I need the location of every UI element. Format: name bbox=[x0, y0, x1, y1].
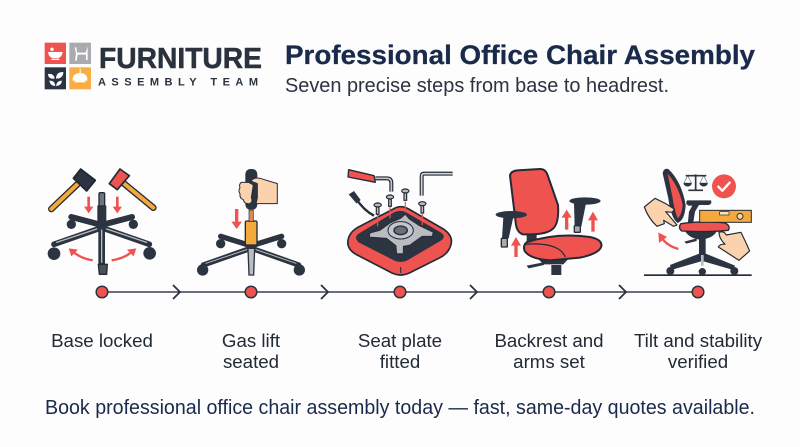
logo tile: red bowl bbox=[45, 43, 66, 64]
rotation arrows bbox=[69, 248, 136, 260]
five star base bbox=[48, 193, 156, 274]
right hand bbox=[718, 232, 750, 260]
dark mallet bbox=[51, 169, 95, 209]
spirit level bbox=[700, 210, 751, 222]
chair base bbox=[666, 229, 738, 275]
up arrows bbox=[511, 210, 598, 257]
step label 4: arms set bbox=[513, 351, 586, 372]
timeline arrows bbox=[173, 285, 626, 299]
timeline bbox=[96, 285, 704, 299]
icon: step 4 backrest and arms set bbox=[496, 169, 601, 275]
power tool cable bbox=[356, 198, 374, 216]
step label 5: verified bbox=[668, 351, 728, 372]
left arm bbox=[496, 211, 527, 247]
screwdriver bbox=[348, 170, 391, 192]
screws bbox=[374, 189, 426, 214]
icon: step 3 seat plate fitted bbox=[348, 170, 453, 275]
mounting plate bbox=[369, 214, 433, 254]
hex key bbox=[422, 174, 453, 196]
logo tile: dark leaves bbox=[45, 67, 66, 89]
icon: step 2 gas lift seated bbox=[197, 169, 305, 276]
right arm bbox=[569, 197, 601, 232]
tilt arrow bbox=[662, 238, 678, 249]
backrest bbox=[663, 169, 686, 223]
down arrow bbox=[231, 209, 242, 229]
subtitle: Seven precise steps from base to headrest. bbox=[285, 74, 669, 97]
seat crease bbox=[525, 244, 565, 257]
alignment ticks bbox=[378, 202, 422, 226]
seat cushion bbox=[524, 236, 601, 260]
seat bbox=[679, 222, 729, 232]
icon: step 1 base locked with mallets bbox=[48, 169, 156, 274]
step label 2: seated bbox=[223, 351, 279, 372]
handle bbox=[245, 169, 257, 210]
floor bbox=[644, 274, 752, 276]
logo tagline: ASSEMBLY TEAM bbox=[98, 76, 258, 88]
hand fingers bbox=[239, 182, 253, 204]
check badge bbox=[712, 174, 736, 198]
title: Professional Office Chair Assembly bbox=[285, 40, 755, 70]
timeline dots bbox=[96, 286, 704, 298]
step label 1: Base locked bbox=[51, 330, 153, 351]
seat underside bbox=[356, 211, 444, 262]
timeline line bbox=[102, 291, 698, 293]
balance scales bbox=[684, 174, 708, 190]
star base bbox=[197, 236, 305, 276]
logo bbox=[45, 43, 262, 89]
logo tile: grey chair bbox=[69, 43, 91, 64]
step label 2: Gas lift bbox=[222, 330, 280, 351]
backrest red panel bbox=[668, 174, 683, 218]
seat cushion bbox=[348, 207, 451, 275]
armrest bbox=[686, 200, 711, 232]
plate ring bbox=[388, 222, 413, 239]
step label 3: fitted bbox=[380, 351, 420, 372]
step label 5: Tilt and stability bbox=[634, 330, 762, 351]
call to action: Book professional office chair assembly today — fast, same-day quotes available. bbox=[45, 397, 755, 419]
gas lift cylinder bbox=[245, 210, 257, 245]
step label 3: Seat plate bbox=[358, 330, 442, 351]
hand palm bbox=[251, 178, 277, 204]
down arrows bbox=[84, 197, 122, 213]
seat front seam bbox=[399, 267, 402, 273]
step label 4: Backrest and bbox=[494, 330, 604, 351]
post and base bbox=[527, 232, 573, 275]
left hand bbox=[644, 198, 677, 226]
red mallet bbox=[109, 169, 153, 208]
logo wordmark: FURNITURE bbox=[99, 43, 262, 75]
icon: step 5 tilt and stability verified bbox=[644, 169, 752, 276]
backrest bbox=[510, 169, 558, 234]
logo tile: orange lamp bbox=[69, 67, 91, 89]
